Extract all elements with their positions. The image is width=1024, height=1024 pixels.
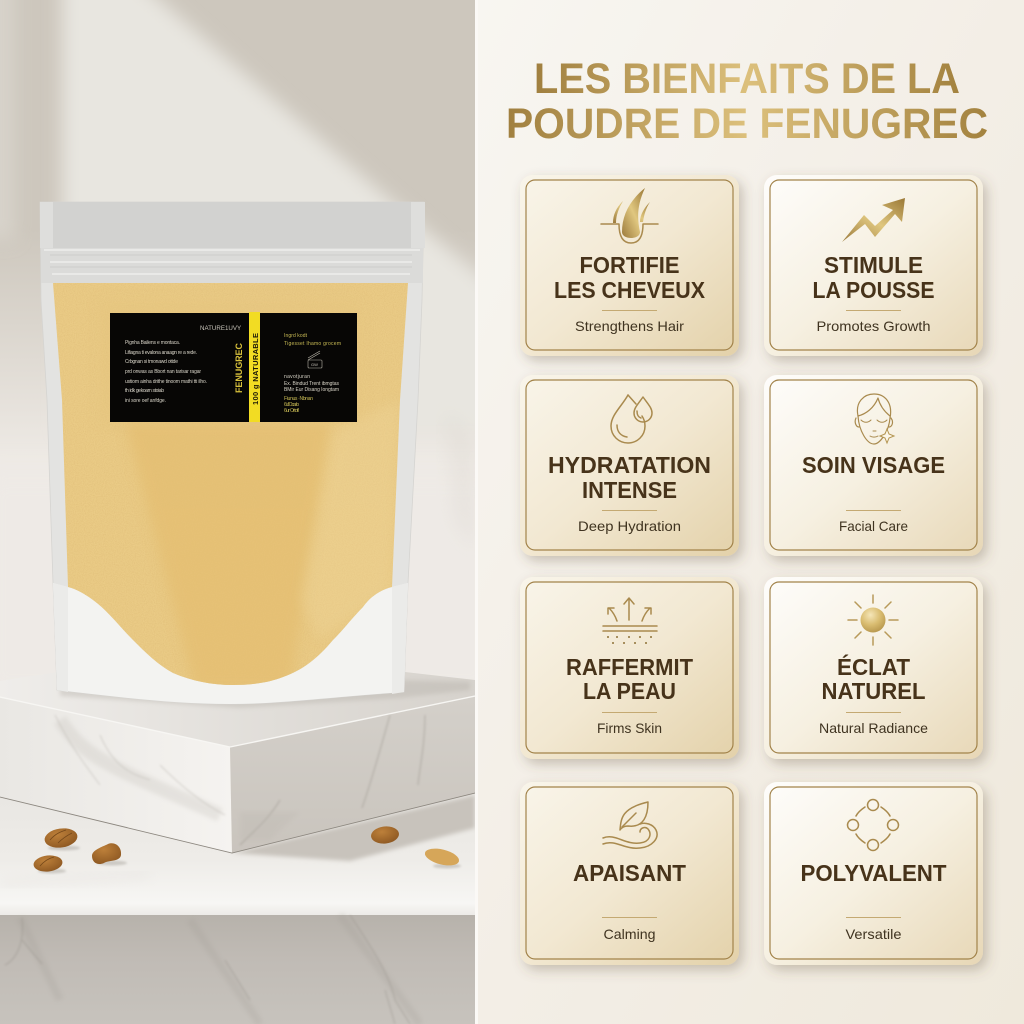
label right copy: BMir Eur Disang Iongtam: [284, 387, 339, 393]
subtitle: Natural Radiance: [819, 720, 928, 736]
label left copy: Pignha Bailens e montaca.: [125, 340, 180, 346]
label rotated name: FENUGREC: [234, 342, 244, 393]
white divider: [475, 0, 478, 1024]
heading: POLYVALENT: [800, 860, 946, 886]
card: éclat naturel: [764, 577, 983, 759]
label brand: NATURE1UVY: [200, 325, 241, 332]
icon: hair follicle: [601, 188, 658, 243]
subtitle: Strengthens Hair: [575, 318, 684, 334]
subtitle: Versatile: [846, 926, 902, 942]
icon: leaf and wave: [603, 802, 657, 848]
subtitle: Firms Skin: [597, 720, 662, 736]
label right copy: Ingrd kodt: [284, 333, 308, 339]
label left copy: [125, 340, 207, 404]
powder darker central band: [125, 422, 330, 690]
label right copy: Tigesset Ihamo grocem: [284, 341, 341, 347]
heading: APAISANT: [573, 860, 686, 886]
heading: SOIN VISAGE: [802, 452, 945, 478]
powder fill: [50, 280, 412, 690]
block left front face: [0, 720, 232, 852]
pouch zip band: [41, 248, 423, 283]
right background panel: [478, 0, 1024, 1024]
block top face: [111, 672, 475, 746]
title: LES BIENFAITS DE LA: [534, 56, 960, 103]
marble block: [0, 672, 475, 853]
title: [506, 56, 988, 148]
pouch body: [40, 202, 424, 704]
icon: connected circles: [848, 800, 898, 850]
product label: [110, 312, 357, 422]
subtitle: Calming: [604, 926, 656, 942]
label right copy: 6uf. Ocasb: [284, 402, 299, 408]
icon: face with sparkle: [855, 394, 894, 444]
pouch top seal: [40, 202, 425, 248]
heading: RAFFERMIT: [566, 654, 693, 680]
wall with light beams: [0, 0, 475, 532]
card: éclat naturel: NATUREL: [822, 678, 926, 704]
label right copy: [284, 333, 341, 414]
label yellow stripe: [249, 312, 260, 422]
heading: STIMULE: [824, 252, 923, 278]
label right copy: 6ur Ortofl: [284, 408, 299, 414]
block right side face: [230, 696, 475, 853]
label right copy: Ex. Bindud Trent ibmgtas: [284, 381, 340, 387]
heading: ÉCLAT: [837, 653, 910, 680]
label left copy: ustiom ainha drithe tinoom mathi tti ilho.: [125, 379, 207, 385]
card: hydratation intense: INTENSE: [582, 477, 677, 503]
label left copy: ini sore oef anfdge.: [125, 398, 166, 404]
card: raffermit la peau: LA PEAU: [583, 678, 676, 704]
subtitle: Deep Hydration: [578, 518, 681, 534]
card: stimule la pousse: [764, 175, 983, 356]
icon: sun: [848, 595, 898, 645]
label left copy: Crbgnan si tmonawd ottde: [125, 359, 178, 365]
icon: water drops: [611, 395, 652, 443]
card: polyvalent: [764, 782, 983, 965]
title: POUDRE DE FENUGREC: [506, 101, 988, 148]
heading: HYDRATATION: [548, 452, 711, 478]
subtitle: Promotes Growth: [816, 318, 930, 334]
fenugreek powder pouch: [40, 202, 425, 704]
icon: firming skin arrows: [603, 598, 657, 643]
marble floor surface: [0, 790, 475, 916]
pouch bottom gusset: [68, 587, 392, 704]
card: soin visage: [764, 375, 983, 556]
card: raffermit la peau: [520, 577, 739, 759]
block cast shadow: [232, 795, 475, 861]
card: fortifie les cheveux: [520, 175, 739, 356]
heading: FORTIFIE: [580, 252, 680, 278]
label right copy: Fiunus ·Nbnan: [284, 396, 313, 402]
subtitle: Facial Care: [839, 518, 908, 534]
label right copy: navotjuran: [284, 374, 310, 380]
fenugreek seeds: [33, 825, 461, 874]
card: fortifie les cheveux: LES CHEVEUX: [554, 277, 706, 303]
card: apaisant: [520, 782, 739, 965]
card: hydratation intense: [520, 375, 739, 556]
card: stimule la pousse: LA POUSSE: [812, 277, 934, 303]
label rotated weight: 100 g NATURABLE: [251, 333, 260, 405]
marble base front face: [0, 915, 475, 1024]
icon: growth arrow: [842, 198, 905, 242]
label right copy: GW: [311, 362, 318, 367]
label left copy: Lifiagna ti evalona anaagn re a rede.: [125, 350, 197, 356]
label left copy: th idk gekoarn stoiab: [125, 388, 164, 394]
left product photo panel: [0, 0, 520, 1024]
bag shadow on block: [60, 680, 470, 708]
label left copy: prd onwas as Bbort nan tarisar ragar: [125, 369, 201, 375]
